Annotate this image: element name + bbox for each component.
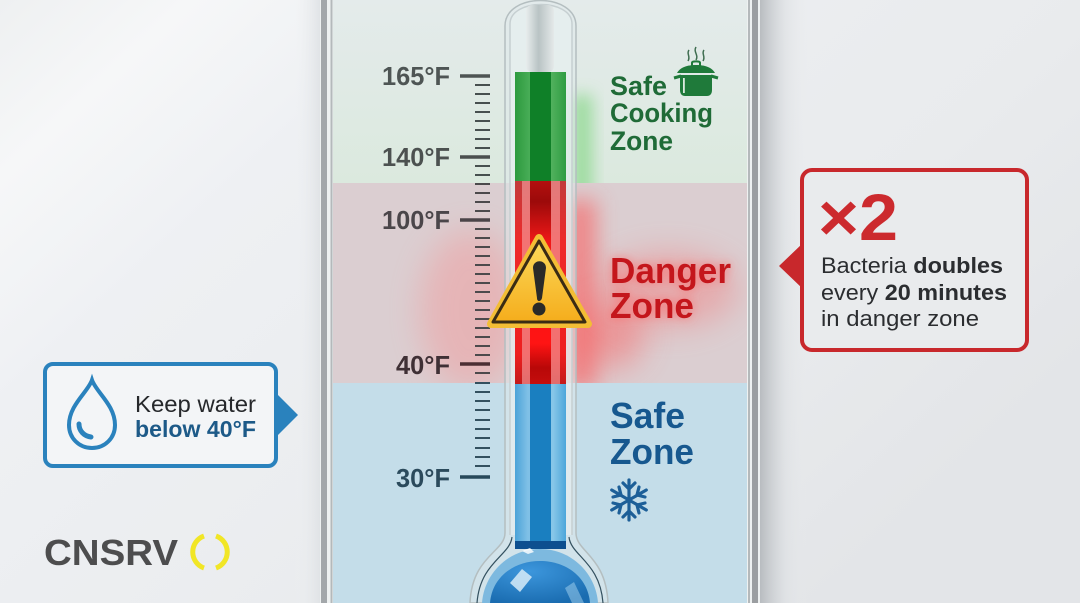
label: safe zone: Safe	[610, 395, 685, 436]
column: green	[515, 72, 566, 182]
label: safe cooking zone	[610, 71, 713, 156]
callout: keep water below 40F	[45, 364, 298, 466]
panel: thermometer board	[320, 0, 760, 603]
callout arrow	[276, 393, 298, 437]
icon: snowflake	[612, 480, 646, 520]
callout text: every 20 minutes	[821, 280, 1007, 305]
scale: temperature labels: 140°F	[382, 142, 450, 172]
empty tube highlight	[526, 5, 554, 72]
scale: temperature labels: 30°F	[396, 463, 450, 493]
icon: warning triangle	[491, 238, 588, 324]
callout box	[802, 170, 1027, 350]
column: red	[515, 181, 566, 384]
scale: tick marks	[460, 76, 490, 477]
icon: cooking pot	[674, 47, 718, 96]
scale: temperature labels	[382, 61, 450, 493]
label: danger zone: Zone	[610, 285, 694, 326]
band: safe zone	[333, 383, 747, 603]
label: safe cooking zone: Cooking	[610, 98, 713, 128]
scale: temperature labels: 100°F	[382, 205, 450, 235]
label: safe zone: Zone	[610, 431, 694, 472]
bulb	[482, 549, 598, 603]
band: safe cooking zone	[333, 0, 747, 183]
column: blue	[515, 384, 566, 544]
callout text: Keep water	[135, 391, 256, 417]
icon: water drop	[69, 380, 115, 448]
glow: green	[572, 95, 592, 205]
callout arrow	[779, 243, 803, 289]
glass tube	[470, 0, 608, 603]
glow: red	[420, 200, 738, 390]
callout text: Bacteria doubles	[821, 253, 1003, 278]
label: danger zone	[610, 250, 731, 326]
label: safe zone	[610, 395, 694, 472]
label: danger zone: Danger	[610, 250, 731, 291]
callout: bacteria doubling	[779, 170, 1027, 350]
callout text: in danger zone	[821, 306, 979, 331]
logo: CNSRV: CNSRV	[44, 532, 178, 573]
thermometer	[470, 0, 608, 603]
callout box	[45, 364, 276, 466]
multiplier: ×2	[818, 180, 898, 254]
label: safe cooking zone: Zone	[610, 126, 673, 156]
callout: keep water below 40F: below 40°F	[135, 416, 256, 442]
scale: temperature labels: 165°F	[382, 61, 450, 91]
scale: temperature labels: 40°F	[396, 350, 450, 380]
band: danger zone	[333, 183, 747, 383]
logo ring	[193, 536, 227, 568]
label: safe cooking zone: Safe	[610, 71, 667, 101]
logo: CNSRV	[44, 532, 227, 573]
board frame	[320, 0, 760, 603]
callout text	[821, 253, 1007, 331]
